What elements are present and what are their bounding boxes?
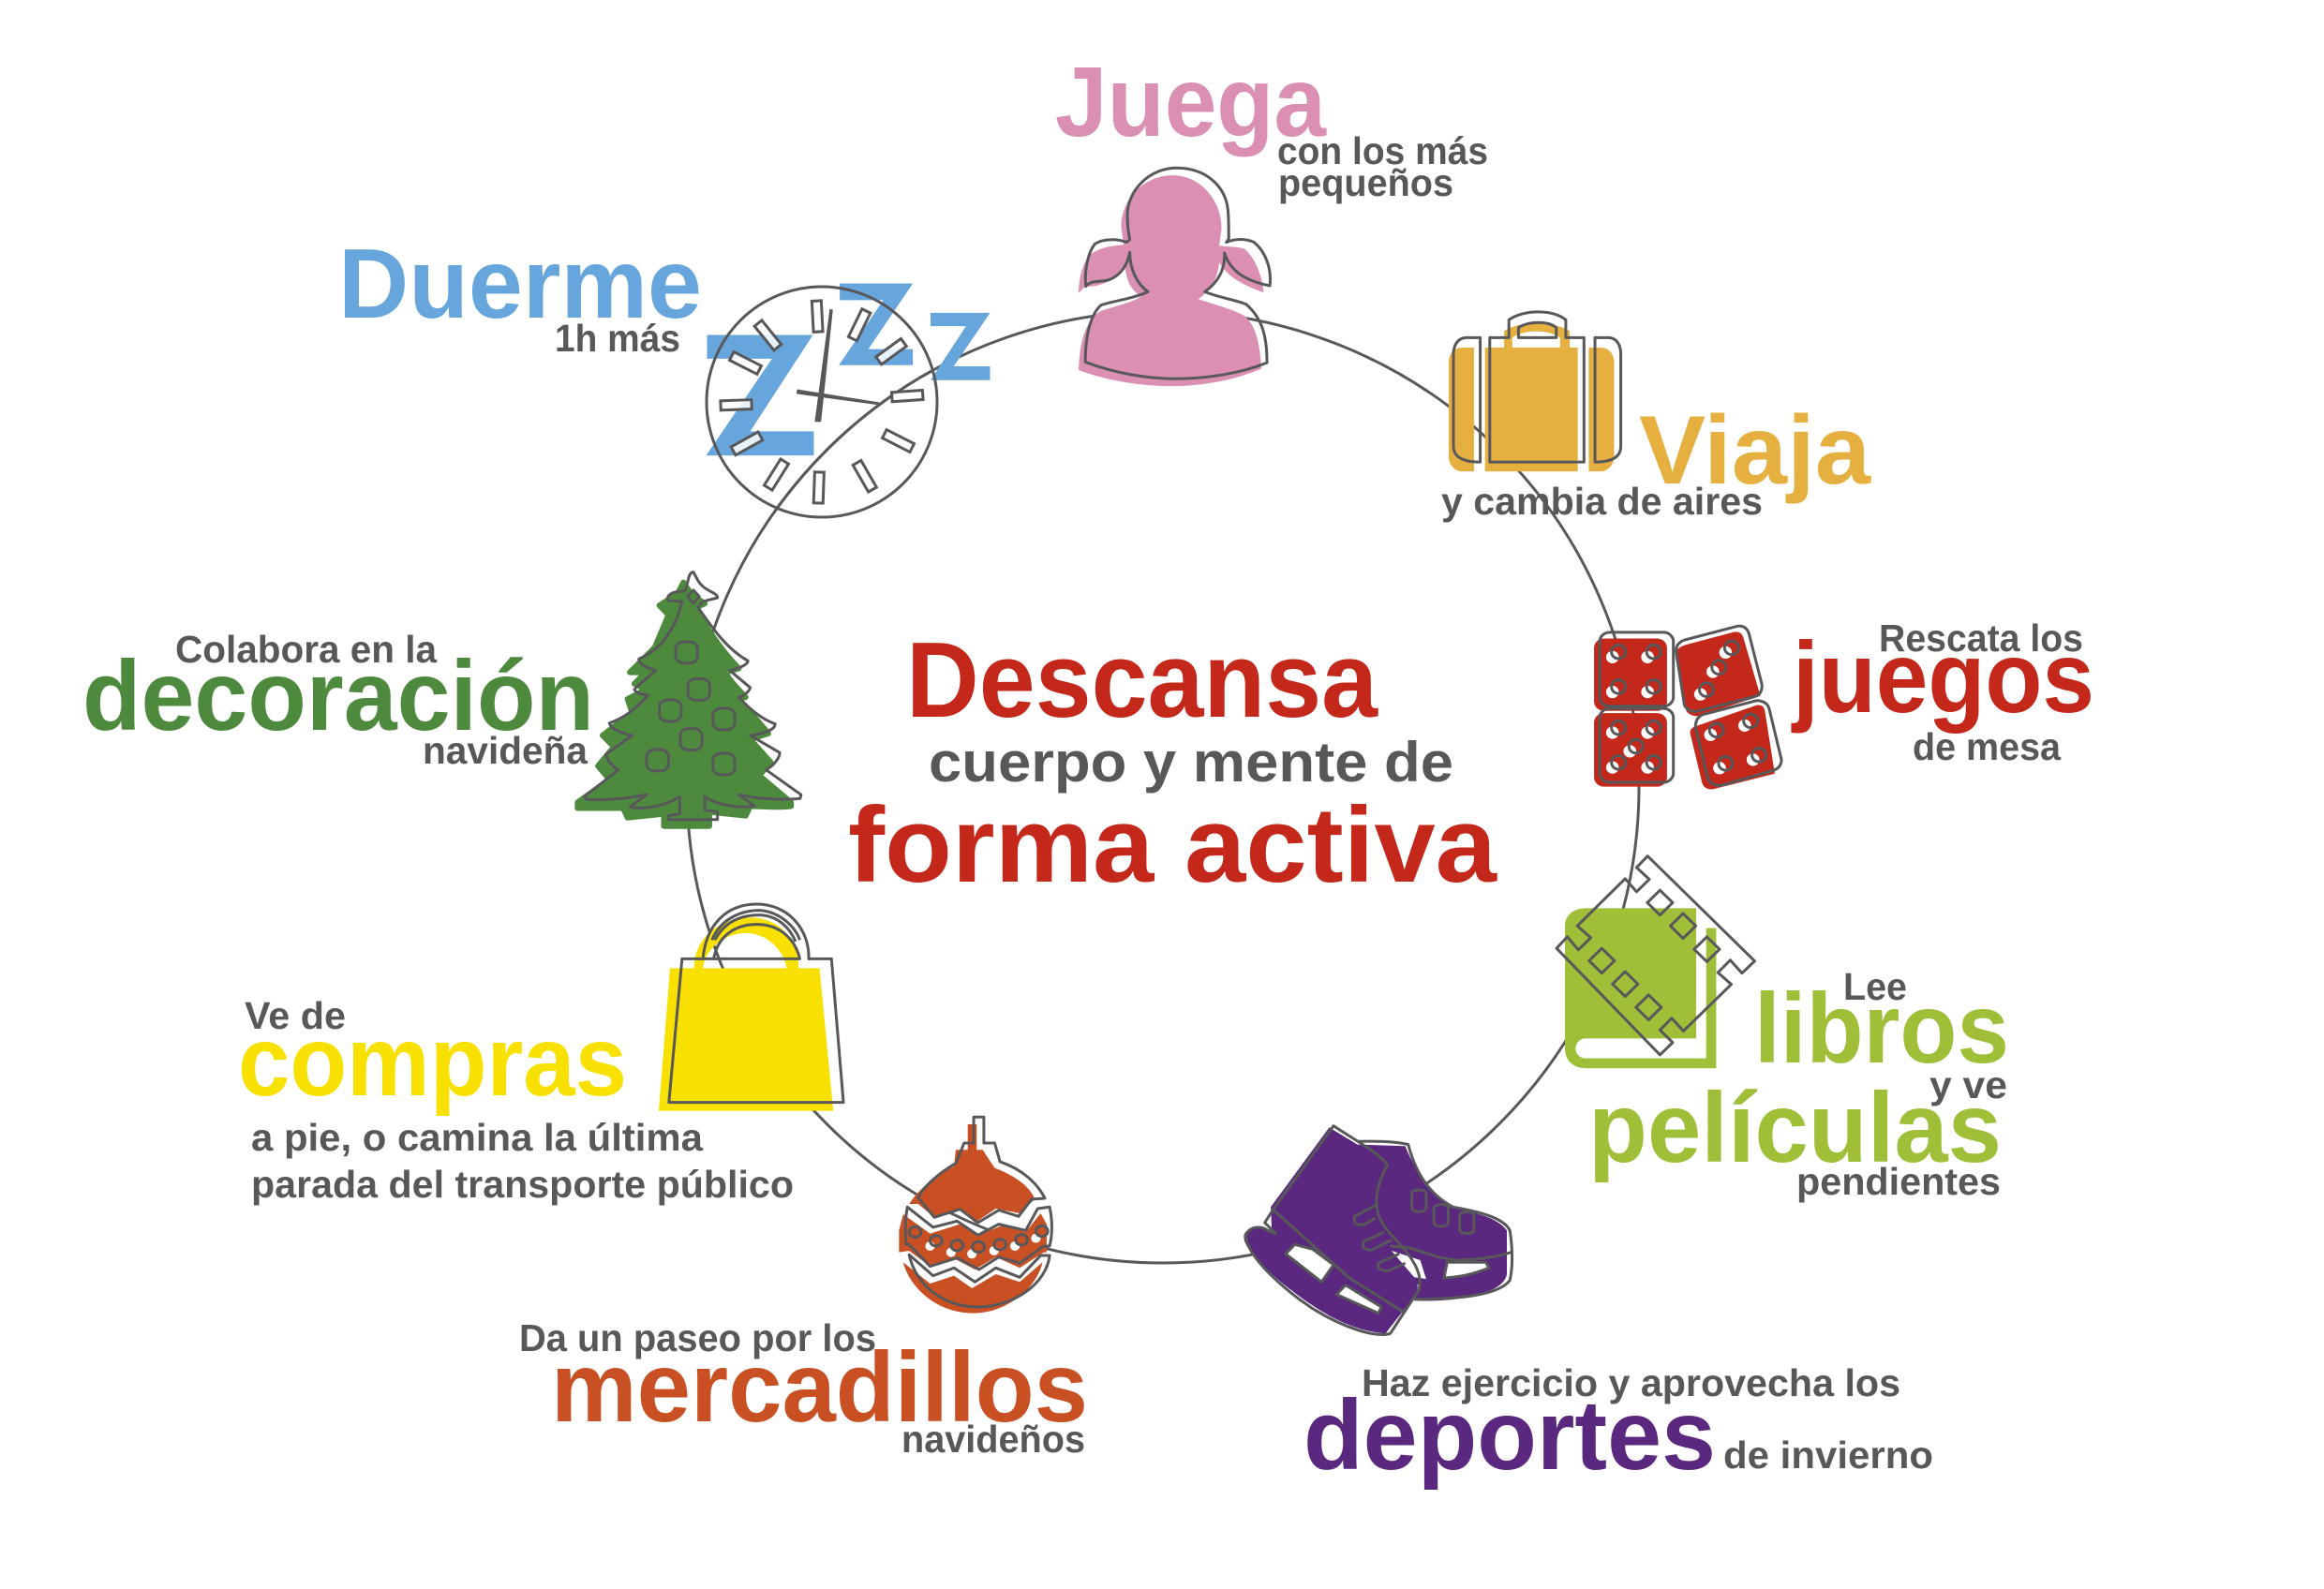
heading: decoración: decoración [82, 641, 594, 751]
central title [848, 621, 1498, 905]
activity: mercadillos [519, 1117, 1088, 1461]
central title: forma activa [848, 786, 1498, 905]
activity: decoración [82, 572, 801, 826]
text: de invierno: de invierno [1723, 1433, 1933, 1477]
heading: películas: películas [1588, 1073, 2002, 1183]
activity: Duerme [338, 229, 991, 517]
central title: cuerpo y mente de [929, 731, 1453, 794]
heading: libros: libros [1754, 973, 2009, 1084]
text: Haz ejercicio y aprovecha los: Haz ejercicio y aprovecha los [1362, 1361, 1900, 1404]
text: Rescata los: Rescata los [1879, 616, 2083, 660]
ring segment over the Z letters [774, 371, 931, 512]
heading: Duerme: Duerme [338, 229, 702, 339]
activity: Viaja [1441, 312, 1871, 523]
heading: mercadillos: mercadillos [551, 1332, 1088, 1443]
text: a pie, o camina la última parada del transporte público: a pie, o camina la última [251, 1116, 704, 1159]
icon: letters Z Z z [707, 283, 991, 455]
text: de mesa: de mesa [1913, 725, 2062, 768]
icon: suitcase [1449, 312, 1621, 471]
heading: deportes: deportes [1304, 1380, 1716, 1491]
activity: Juega [1055, 47, 1488, 386]
text: y cambia de aires: y cambia de aires [1441, 480, 1763, 523]
text: con los más pequeños [1277, 129, 1488, 204]
heading: Juega: Juega [1055, 47, 1327, 157]
text: con los más pequeños: con los más [1277, 129, 1488, 172]
heading: juegos: juegos [1791, 620, 2094, 734]
icon: christmas bauble [899, 1117, 1051, 1314]
activity: juegos de mesa [1594, 616, 2094, 789]
central title: Descansa [906, 621, 1379, 740]
icon: ice skates [1244, 1126, 1512, 1334]
text: a pie, o camina la última parada del transporte público [251, 1116, 794, 1206]
icon: book and film strip [1557, 856, 1754, 1068]
text: y ve: y ve [1929, 1063, 2007, 1106]
heading: compras: compras [238, 1006, 627, 1117]
text: con los más pequeños: pequeños [1278, 161, 1453, 204]
activity: libros y películas [1557, 856, 2009, 1203]
icon: christmas tree [577, 572, 801, 826]
text: Da un paseo por los: Da un paseo por los [519, 1316, 876, 1359]
text: a pie, o camina la última parada del transporte público: parada del transporte público [251, 1163, 794, 1206]
text: Colabora en la: Colabora en la [175, 628, 438, 671]
icon: girl with pigtails [1079, 168, 1270, 386]
heading: Viaja: Viaja [1639, 396, 1871, 505]
activity: compras [238, 904, 843, 1206]
activity: deportes de invierno [1244, 1126, 1933, 1491]
text: pendientes: pendientes [1796, 1160, 2001, 1203]
text: 1h más: 1h más [555, 317, 680, 360]
ring connecting the activities [687, 311, 1639, 1263]
text: navideños: navideños [901, 1418, 1085, 1461]
text: Ve de: Ve de [245, 994, 346, 1037]
icon: shopping bag [659, 904, 843, 1111]
icon: dice [1594, 626, 1781, 789]
text: navideña: navideña [423, 729, 588, 772]
text: Lee: Lee [1843, 965, 1907, 1008]
icon: clock [707, 287, 937, 517]
